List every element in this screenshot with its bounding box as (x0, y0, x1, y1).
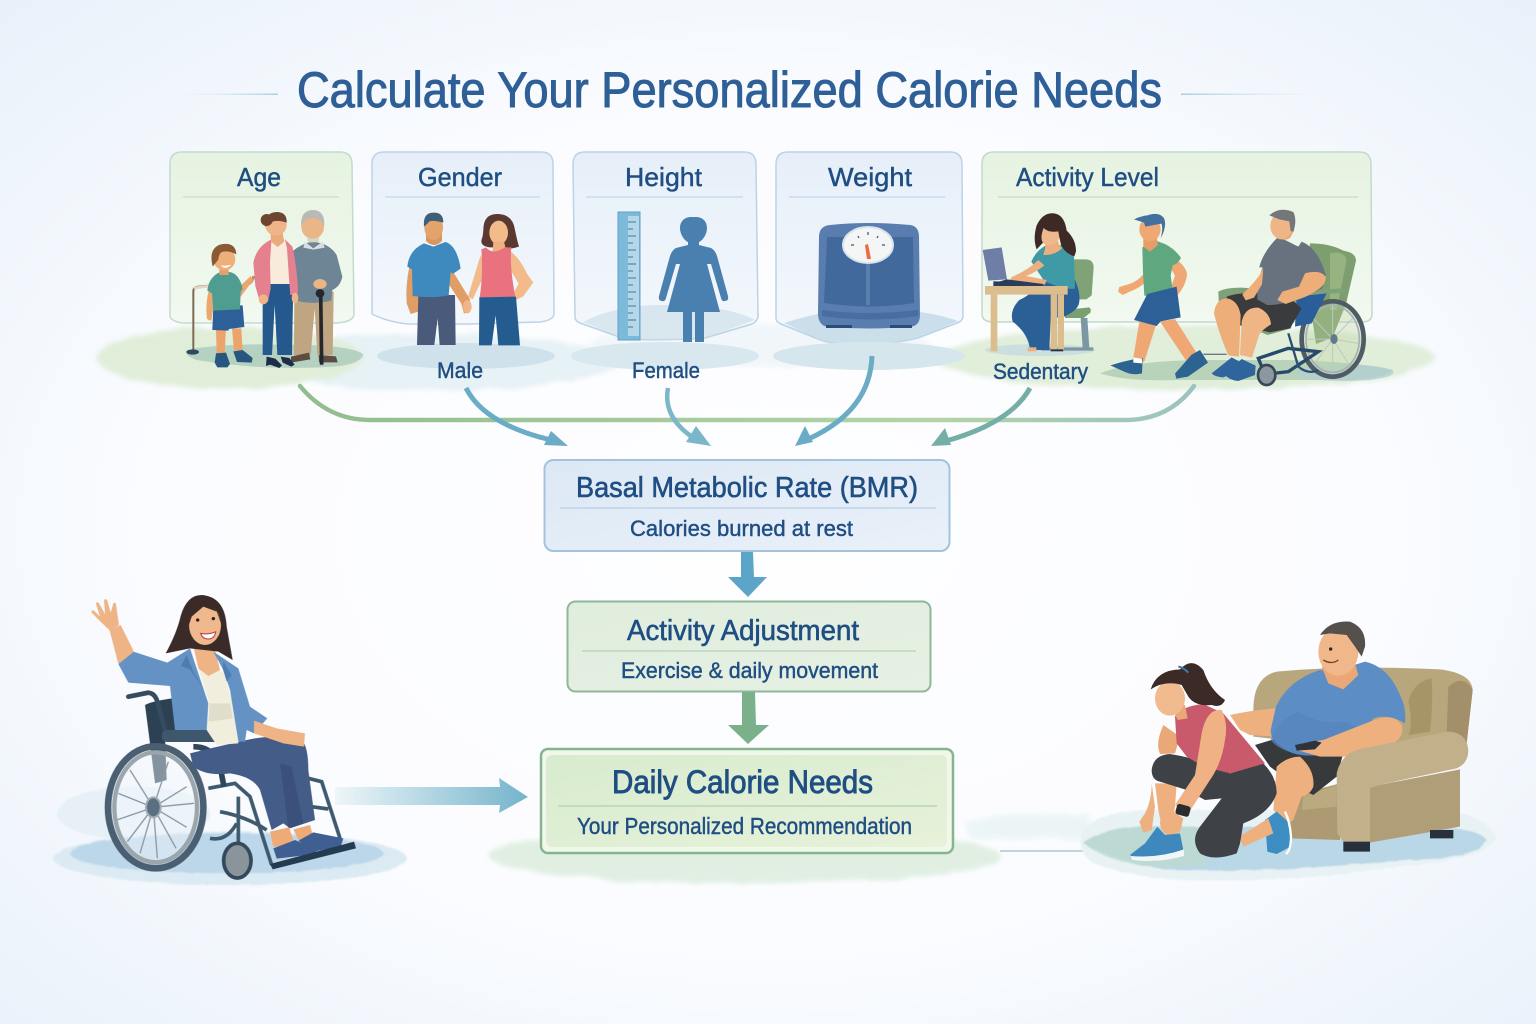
illustration: child, adult and older adult (186, 210, 363, 368)
arrow: female to BMR (667, 388, 711, 446)
woman (1130, 663, 1291, 861)
front caster (224, 843, 251, 878)
arrow: age and activity arc into BMR (300, 386, 1194, 420)
heading: age: Age (237, 162, 281, 192)
ground ellipse: weight (773, 342, 965, 370)
illustration: woman tying shoe beside man on sofa (1081, 621, 1497, 881)
subtext: daily calorie needs: Your Personalized Recommendation (577, 813, 912, 839)
rear wheel (112, 751, 199, 864)
hand on knee (254, 721, 305, 747)
arrow: BMR to activity adjustment (728, 552, 767, 597)
heading: daily calorie needs: Daily Calorie Needs (612, 764, 873, 800)
illustration: man and woman (406, 213, 533, 345)
box: daily calorie needs (541, 749, 953, 853)
person walking (1110, 214, 1208, 379)
label: sedentary: Sedentary (993, 359, 1088, 384)
shirt (198, 668, 238, 745)
arrow: wheelchair user to daily needs (335, 778, 528, 813)
panel: height (571, 152, 759, 370)
wash under daily calorie needs (489, 828, 1001, 884)
box: activity adjustment (568, 602, 930, 692)
hair (166, 595, 233, 660)
feet (270, 827, 293, 847)
neck and chest (193, 643, 220, 676)
ground shadow: weight panel (784, 309, 958, 345)
ground washes behind input panels (97, 323, 1435, 390)
older adult (294, 292, 334, 355)
jacket (118, 648, 208, 730)
arrow: male to BMR (466, 388, 568, 446)
frame (208, 778, 340, 865)
adult (263, 283, 293, 355)
subtext: activity adjustment: Exercise & daily movement (621, 658, 878, 683)
heading: height: Height (625, 162, 703, 192)
label: male: Male (437, 358, 483, 383)
title: Calculate Your Personalized Calorie Needs (297, 62, 1162, 118)
child (216, 328, 243, 353)
panel: weight (773, 152, 965, 370)
person at desk (983, 213, 1094, 351)
connector: right figures to daily needs (965, 814, 1090, 851)
icon: person silhouette (659, 217, 728, 342)
arrow: sedentary to BMR (931, 388, 1030, 446)
ground shadow: gender (377, 343, 555, 369)
armrest (162, 730, 223, 742)
illustration: woman in wheelchair waving (53, 595, 407, 885)
panel: activity level (982, 152, 1393, 385)
sofa arm and base (1370, 769, 1460, 843)
panel: age (170, 152, 363, 368)
label: female: Female (632, 358, 700, 383)
man on sofa (1230, 621, 1405, 823)
ground shadow: height panel (583, 305, 755, 340)
heading: BMR: Basal Metabolic Rate (BMR) (576, 472, 918, 504)
heading: activity level: Activity Level (1016, 162, 1159, 192)
arrow: weight to BMR (795, 356, 872, 446)
panel: gender (372, 152, 555, 369)
raised arm (109, 625, 134, 664)
icon: bathroom scale (818, 223, 920, 328)
heading: weight: Weight (828, 162, 913, 192)
ground ellipse: height (571, 342, 759, 370)
trousers (190, 737, 315, 830)
ground wash (1081, 810, 1497, 881)
sofa (1230, 621, 1473, 852)
illustration: three activity levels (983, 210, 1393, 385)
arrow: activity adjustment to daily needs (728, 692, 769, 744)
person in wheelchair (1203, 210, 1364, 385)
heading: activity adjustment: Activity Adjustment (627, 615, 859, 647)
face (189, 605, 221, 645)
ground wash (53, 787, 407, 885)
box: basal metabolic rate (544, 460, 950, 551)
wheelchair back and handle (145, 698, 177, 783)
subtext: BMR: Calories burned at rest (630, 516, 853, 541)
icon: ruler (618, 212, 640, 340)
heading: gender: Gender (418, 162, 502, 192)
